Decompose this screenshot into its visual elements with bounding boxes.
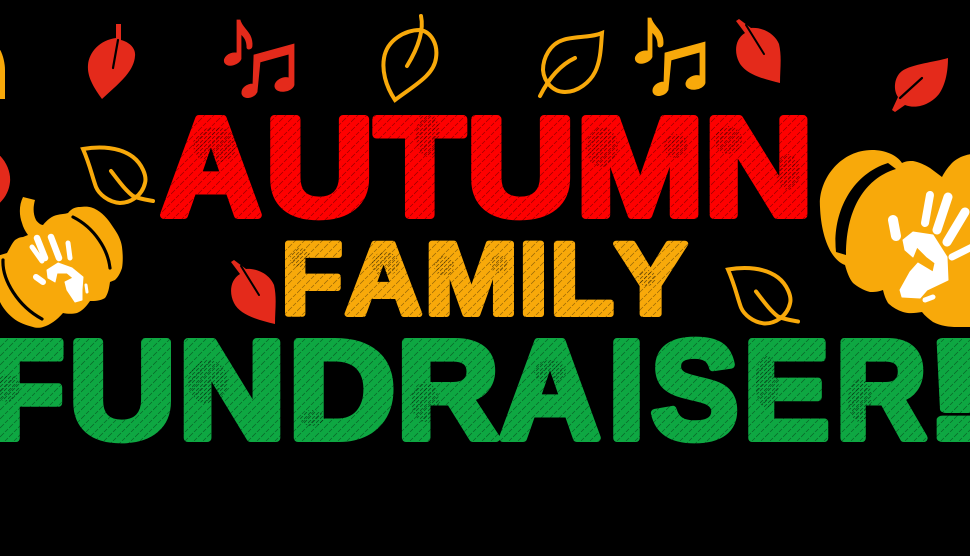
title: AUTUMN: U xyxy=(266,89,374,245)
icon: orange music notes xyxy=(635,18,705,96)
title: AUTUMN: N xyxy=(704,89,813,245)
title: AUTUMN: M xyxy=(576,89,704,245)
title: AUTUMN: T xyxy=(375,89,465,245)
pumpkin body xyxy=(820,150,970,327)
pumpkin ribs xyxy=(3,217,110,319)
title: FAMILY: F xyxy=(281,222,343,336)
icon: orange outline leaf, top right xyxy=(540,33,602,96)
handprint xyxy=(893,195,970,300)
title: FUNDRAISER!: R xyxy=(396,312,499,468)
title: FUNDRAISER!: I xyxy=(608,312,645,468)
title: FAMILY: Y xyxy=(614,222,687,336)
title: FUNDRAISER!: N xyxy=(178,312,286,468)
icon: red leaf, far right xyxy=(892,58,948,112)
title: FUNDRAISER!: A xyxy=(500,312,600,468)
icon: red music notes xyxy=(224,20,294,98)
icon: red leaf, top right xyxy=(736,19,781,83)
icon: small pumpkin with handprint xyxy=(0,197,123,328)
title: FAMILY: A xyxy=(345,222,422,336)
title: AUTUMN: A xyxy=(160,89,262,245)
icon: orange outline leaf, left of AUTUMN xyxy=(83,148,153,203)
icon: red leaf, top left xyxy=(88,24,135,99)
title: FUNDRAISER!: ! xyxy=(923,312,970,468)
title: AUTUMN: U xyxy=(466,89,575,245)
title: AUTUMN xyxy=(160,89,813,245)
pumpkin body xyxy=(0,197,123,328)
title: FUNDRAISER!: D xyxy=(288,312,396,468)
icon: red leaf, cut off at left edge xyxy=(0,152,10,206)
title: FAMILY: L xyxy=(550,222,614,336)
title: FAMILY: I xyxy=(519,222,548,336)
title: FUNDRAISER! xyxy=(0,312,970,468)
title: FUNDRAISER!: E xyxy=(743,312,830,468)
handprint xyxy=(32,237,87,302)
icon: orange outline leaf, right of FAMILY xyxy=(728,268,798,324)
icon: large pumpkin with handprint xyxy=(820,150,970,327)
title: FAMILY xyxy=(281,222,687,336)
pumpkin rib xyxy=(835,163,896,255)
icon: red leaf, beside FAMILY xyxy=(231,260,276,324)
title: FUNDRAISER!: R xyxy=(836,312,927,468)
icon: orange leaf fragment at left edge xyxy=(0,46,5,99)
title: FUNDRAISER!: S xyxy=(651,312,739,468)
title: FAMILY: M xyxy=(424,222,518,336)
icon: orange outline leaf, top centre xyxy=(383,16,436,100)
title: FUNDRAISER!: U xyxy=(69,312,176,468)
